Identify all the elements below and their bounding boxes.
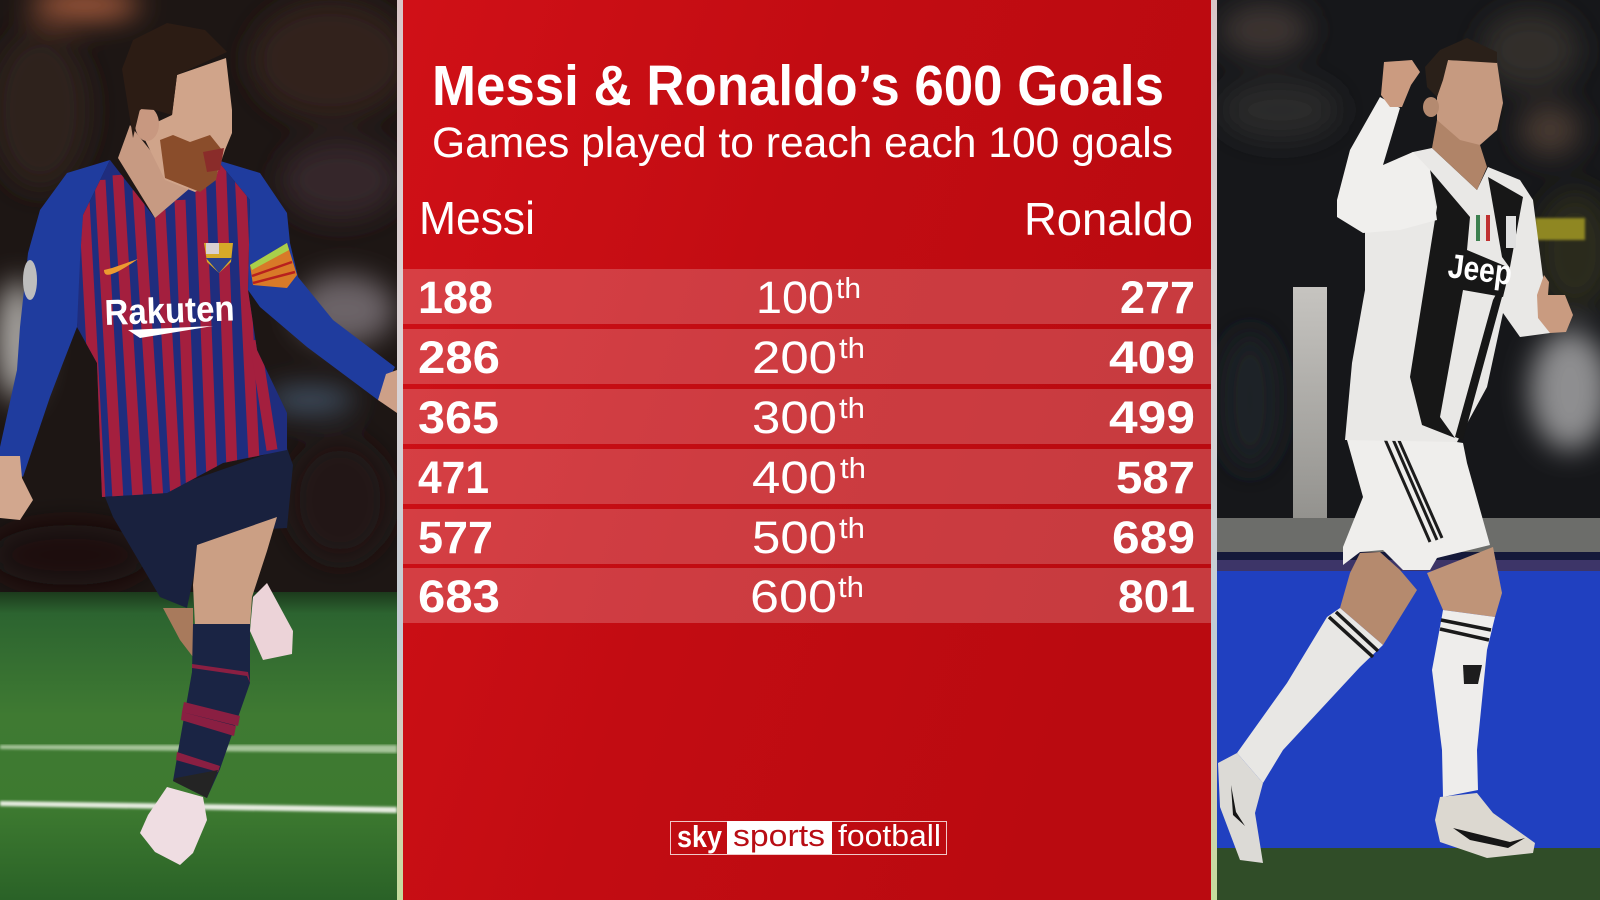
hair [122,23,227,138]
hair [1425,38,1497,97]
back boot [250,583,293,660]
shirt [1345,148,1550,442]
Italian flag badge [1476,215,1490,241]
row: 500th: 689 [1112,512,1195,563]
row: 400th: 400 [752,452,837,503]
front thigh [193,517,277,626]
row: 200th: 409 [1109,332,1195,383]
row: 500th: th [839,513,865,545]
thumbs-up hand [1537,275,1573,333]
row: 100th: 188 [418,272,493,323]
stadium crowd background [0,0,410,600]
photo: Lionel Messi celebrating [0,0,410,900]
row: 400th: th [840,453,866,485]
shorts [105,448,293,608]
column header: Messi: Messi [419,192,535,244]
dark strip [1217,552,1600,560]
row: 400th [403,449,1211,504]
front thigh [1427,547,1502,617]
back sock [1237,608,1383,783]
row: 400th: 587 [1116,452,1195,503]
row: 200th: th [839,333,865,365]
row: 600th: th [838,572,864,604]
row: 600th: 801 [1118,571,1195,622]
captain armband [250,243,297,288]
row: 100th [403,269,1211,324]
J crest [1506,216,1516,248]
sponsor: Rakuten: Rakuten [104,287,235,333]
row: 400th: 471 [418,452,489,503]
left edge stripe [397,0,403,900]
shorts stripes [1384,440,1444,543]
ear [1423,97,1439,117]
club crest [204,243,233,273]
purple strip [1217,560,1600,572]
Champions League patch [23,260,37,300]
crowd background [1217,0,1600,530]
logo: sky sports football [670,818,946,854]
shorts [1343,430,1490,570]
row: 500th: 500 [752,512,837,563]
red central panel [403,0,1211,900]
row: 300th: 499 [1109,392,1195,443]
logo: sky sports football: sky [677,819,723,854]
head: face and beard [135,58,232,192]
kit logo: swoosh [104,259,138,275]
pitch lines [0,745,397,813]
viewer-right hand [378,370,397,413]
sponsor: Jeep: Jeep [1446,247,1514,293]
sock [173,624,250,798]
row: 300th [403,389,1211,444]
row: 500th [403,509,1211,564]
row: 100th: 100 [756,272,834,323]
white post [1293,287,1327,518]
viewer-left hand [0,456,33,520]
row: 100th: th [836,273,861,305]
collar and neck [118,125,188,218]
raised fist [1381,60,1420,107]
title: Messi & Ronaldo’s 600 Goals [432,54,1164,118]
sleeves [0,160,395,477]
barrier [1217,518,1600,553]
back boot [1218,753,1263,863]
front sock [1432,610,1495,797]
subtitle: Games played to reach each 100 goals [432,119,1173,167]
row: 200th: 286 [418,332,500,383]
back lower leg [163,608,193,657]
row: 300th: 365 [418,392,499,443]
raised arm [1337,97,1437,233]
column header: Ronaldo: Ronaldo [1024,193,1193,245]
row: 600th [403,568,1211,623]
logo: sky sports football: football [838,818,941,853]
striped shirt [77,160,287,497]
logo: sky sports football: sports [733,818,825,853]
photo: Cristiano Ronaldo celebrating [1217,0,1600,900]
blue LED board [1217,571,1600,849]
row: 600th: 683 [418,571,500,622]
grass [1217,848,1600,900]
front boot [1435,793,1535,858]
front boot [140,787,207,865]
row: 100th: 277 [1120,272,1195,323]
row: 300th: 300 [752,392,837,443]
neck [1432,120,1487,190]
row: 300th: th [839,393,865,425]
row: 200th: 200 [752,332,837,383]
row: 500th: 577 [418,512,493,563]
sponsor underbar [128,326,213,338]
row: 200th [403,329,1211,384]
face [1437,60,1503,145]
pitch [0,592,397,900]
right edge stripe [1211,0,1217,900]
black shirt stripes [1410,170,1523,440]
row: 600th: 600 [750,571,837,622]
back thigh [1340,552,1417,645]
